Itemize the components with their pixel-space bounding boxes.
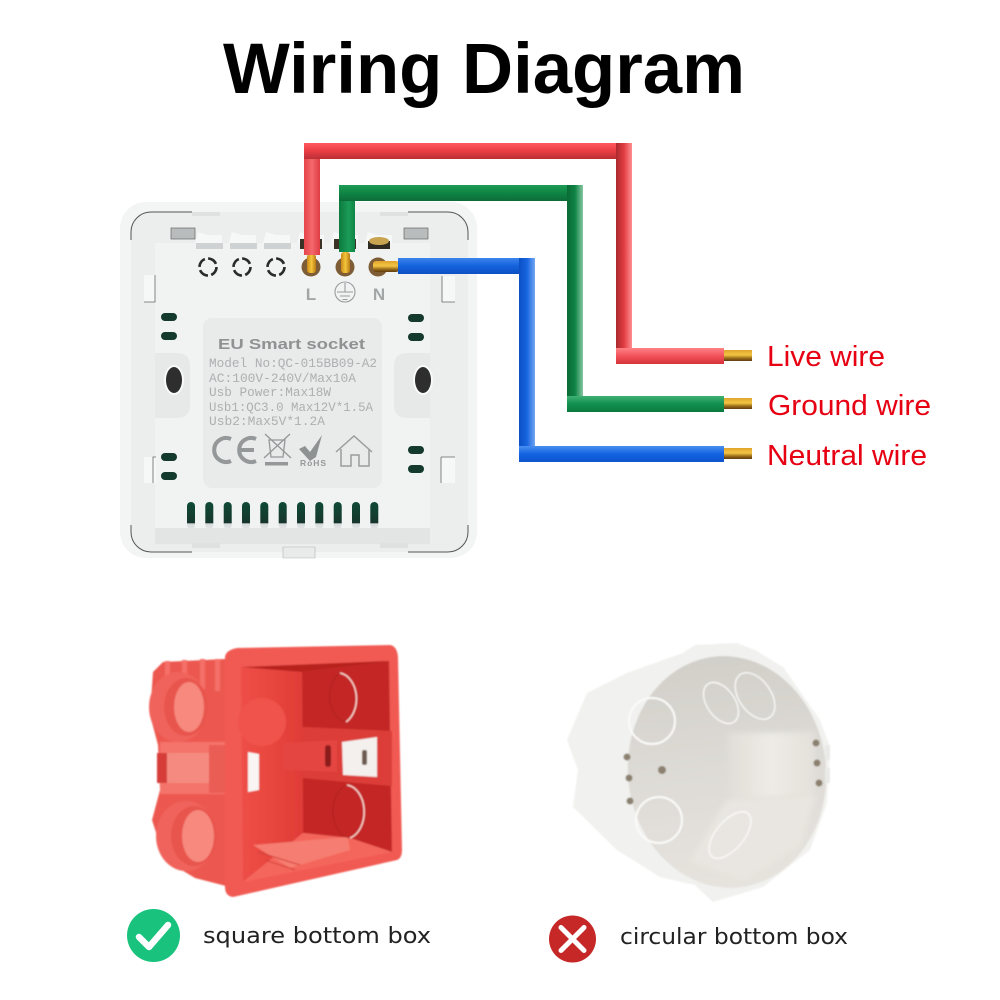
terminal markings L ground N: L <box>306 285 316 304</box>
product label <box>203 318 382 488</box>
panel: red square bottom box <box>149 645 402 897</box>
panel: white circular bottom box <box>567 643 838 902</box>
terminal markings L ground N <box>306 282 385 304</box>
icon: RoHS check: RoHS <box>300 458 326 468</box>
product label: Usb Power:Max18W <box>209 385 331 400</box>
icon: RoHS check <box>299 435 326 468</box>
interior top wall <box>241 661 389 672</box>
icon: crossed-out bin <box>264 434 291 466</box>
back wall <box>727 732 815 800</box>
side clips <box>144 275 455 483</box>
icon: green check <box>127 909 180 962</box>
red live wire <box>304 143 724 364</box>
icon: red cross <box>549 916 596 962</box>
knockout arcs <box>340 673 364 838</box>
floor <box>690 795 815 880</box>
interior left wall <box>241 667 303 882</box>
product label: Usb1:QC3.0 Max12V*1.5A <box>209 400 373 415</box>
outer shell <box>567 643 830 902</box>
opening <box>616 646 838 898</box>
vent slots <box>187 502 378 529</box>
blue neutral wire <box>398 258 724 462</box>
terminal markings L ground N: N <box>373 285 385 304</box>
product label: EU Smart socket <box>218 337 365 353</box>
side slots <box>161 313 424 480</box>
top and bottom tabs <box>192 212 408 548</box>
side ribs <box>165 659 220 691</box>
interior back wall <box>302 662 392 852</box>
interior floor <box>243 833 392 882</box>
socket outer frame <box>120 202 477 558</box>
green ground wire <box>339 185 724 412</box>
terminal notches <box>195 232 392 243</box>
panel: socket back plate <box>120 202 477 558</box>
title: Wiring Diagram <box>223 30 745 109</box>
brass pins at the terminals <box>307 252 399 273</box>
screw holes <box>624 740 822 804</box>
centre mounting lug <box>283 740 337 772</box>
white clip right <box>342 737 377 777</box>
caption: circular bottom box: circular bottom box <box>620 925 848 950</box>
caption: square bottom box: square bottom box <box>203 924 431 949</box>
terminal screws <box>300 239 356 249</box>
mounting holes <box>155 353 190 418</box>
product label: Model No:QC-015BB09-A2 <box>209 356 377 371</box>
brass terminal rings <box>302 258 320 276</box>
icon: house <box>336 436 372 466</box>
conduit barrel top <box>149 672 208 742</box>
right side tabs <box>825 745 830 783</box>
product label: AC:100V-240V/Max10A <box>209 371 356 386</box>
conduit barrel bottom <box>156 801 217 871</box>
icon: CE mark <box>214 438 256 462</box>
knockouts <box>629 666 783 865</box>
label: ground wire: Ground wire <box>768 390 931 422</box>
front frame <box>225 645 402 897</box>
white clip left <box>248 752 259 792</box>
label: live wire: Live wire <box>767 341 885 373</box>
socket body <box>155 243 430 528</box>
label: neutral wire: Neutral wire <box>767 440 927 472</box>
product label: Usb2:Max5V*1.2A <box>209 414 325 429</box>
brass wire ends <box>724 350 752 459</box>
box side with conduit barrels <box>150 659 226 886</box>
empty screw holes <box>200 258 284 276</box>
